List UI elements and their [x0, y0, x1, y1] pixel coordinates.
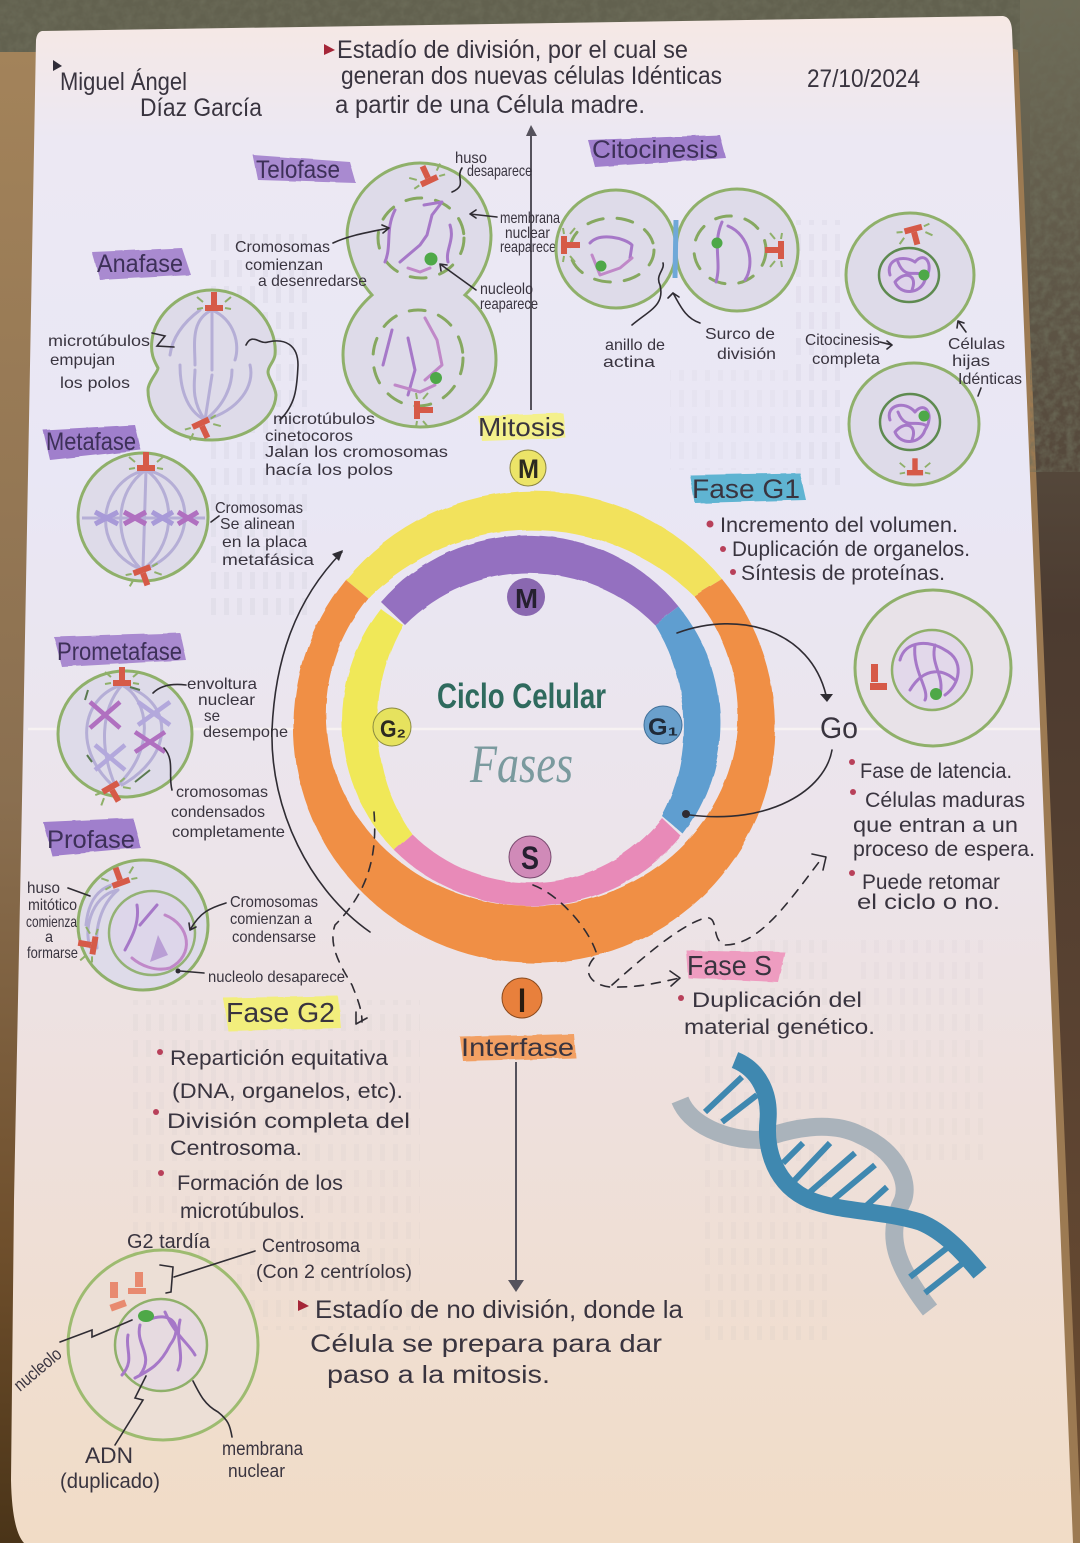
inner ring: G2 phase [342, 609, 412, 850]
cell: anafase [148, 290, 276, 445]
telofase labels: nucleolo [480, 281, 533, 298]
profase labels: mitótico [28, 897, 77, 914]
profase labels: comienzan a [230, 911, 312, 928]
G2 tardia labels [10, 1231, 412, 1493]
prometafase labels: nuclear [198, 692, 256, 709]
metafase labels: metafásica [222, 552, 314, 569]
anafase labels: los polos [60, 375, 130, 392]
cell: G2 tardia [68, 1250, 258, 1440]
G2 tardia labels: nucleolo [10, 1344, 65, 1395]
panel: Fase G1 [690, 473, 970, 585]
arrow: G1 to G0 [677, 624, 833, 702]
cell: metafase [78, 452, 208, 591]
profase labels: nucleolo desaparece [208, 969, 345, 986]
outer ring: interphase segment [293, 579, 775, 963]
author name: Díaz García [140, 94, 262, 122]
center title: Ciclo Celular [437, 677, 606, 716]
heading: Prometafase: Prometafase [57, 638, 182, 666]
heading: Profase [43, 818, 141, 856]
arrow: cycle progression left [272, 550, 370, 932]
arrow: G0 to G1 [682, 750, 832, 818]
daughter cell labels: completa [812, 351, 880, 368]
dashed arrow: G2 to Fase G2 [333, 812, 375, 1024]
cell: profase [75, 860, 208, 990]
profase labels: condensarse [232, 929, 316, 946]
phase badge: S: S [521, 840, 539, 876]
anafase labels [48, 333, 448, 479]
anafase labels: microtúbulos [273, 411, 375, 428]
metafase labels: en la placa [222, 534, 307, 551]
dashed arrow: S to Fase S and G0 [533, 854, 826, 987]
mitosis definition [324, 36, 722, 119]
cell: prometafase [58, 667, 192, 810]
telofase labels: a desenredarse [258, 273, 367, 290]
telofase labels: membrana [500, 210, 560, 227]
G2 tardia labels: Centrosoma [262, 1236, 360, 1257]
inner ring: G1 phase [655, 607, 720, 834]
heading: Citocinesis: Citocinesis [592, 136, 718, 164]
metafase labels [211, 500, 314, 569]
center title [437, 677, 606, 794]
arrow: interphase down [508, 1062, 524, 1292]
panel: Fase G2: microtúbulos. [180, 1200, 305, 1223]
phase badge: I: I [518, 982, 526, 1020]
panel: Fase S: Fase S [687, 950, 772, 981]
phase badge: G1 [644, 706, 682, 744]
panel: Fase G1: Incremento del volumen. [720, 514, 958, 537]
metafase labels: Se alinean [220, 516, 295, 533]
profase labels: comienza [26, 914, 77, 931]
heading: Telofase: Telofase [256, 156, 340, 184]
panel: Fase S: material genético. [684, 1016, 875, 1039]
phase badge: M purple: M [515, 583, 538, 614]
inner ring: M phase [381, 535, 679, 625]
cell: telofase [343, 159, 496, 427]
panel: Fase G1: Duplicación de organelos. [732, 538, 970, 561]
cell: G0 [855, 590, 1011, 746]
inner ring: S phase [394, 818, 681, 906]
panel: Fase G2: Centrosoma. [170, 1137, 302, 1160]
cell: citocinesis [556, 189, 798, 311]
mitosis definition: Estadío de división, por el cual se [337, 36, 688, 64]
metafase labels: Cromosomas [215, 500, 303, 517]
heading: Profase: Profase [47, 826, 135, 854]
telofase labels: nuclear [505, 225, 551, 242]
G2 tardia labels: (duplicado) [60, 1470, 160, 1493]
panel: Fase G2: División completa del [167, 1110, 410, 1133]
phase badge: G1: G₁ [648, 714, 678, 741]
telofase labels: reaparece [500, 239, 556, 256]
icon: DNA helix [680, 1060, 980, 1310]
prometafase labels: completamente [172, 824, 285, 841]
telofase labels: desaparece [467, 163, 532, 180]
daughter cell labels [805, 321, 1022, 396]
G2 tardia labels: ADN [85, 1443, 133, 1468]
panel: Fase G1: Síntesis de proteínas. [741, 562, 945, 585]
cell: daughter bottom [849, 363, 979, 485]
panel: Fase S [678, 950, 875, 1039]
prometafase labels: envoltura [187, 676, 257, 693]
citocinesis labels: actina [603, 354, 655, 371]
panel: G0 text: proceso de espera. [853, 838, 1035, 861]
daughter cell labels: hijas [952, 353, 990, 370]
phase badge: M yellow: M [518, 454, 539, 484]
interphase definition: Estadío de no división, donde la [315, 1296, 683, 1324]
citocinesis labels: Surco de [705, 326, 775, 343]
daughter cell labels: Citocinesis [805, 332, 880, 349]
G2 tardia labels: membrana [222, 1439, 303, 1460]
profase labels: formarse [27, 945, 78, 962]
phase badge: G2: G₂ [380, 716, 406, 743]
date: 27/10/2024 [807, 65, 920, 93]
author name: Miguel Ángel [60, 67, 187, 96]
anafase labels: hacía los polos [265, 462, 393, 479]
G2 tardia labels: G2 tardía [127, 1231, 211, 1253]
label: Mitosis: Mitosis [478, 412, 565, 442]
panel: G0 text: Fase de latencia. [860, 760, 1012, 783]
prometafase labels: desempone [203, 724, 288, 741]
interphase definition: Célula se prepara para dar [310, 1330, 662, 1358]
telofase labels: Cromosomas [235, 239, 330, 256]
profase labels: a [45, 929, 53, 946]
profase labels: huso [27, 880, 60, 897]
anafase labels: cinetocoros [265, 428, 353, 445]
G2 tardia labels: nuclear [228, 1461, 285, 1481]
telofase labels: reaparece [480, 296, 538, 313]
panel: Fase S: Duplicación del [692, 989, 862, 1012]
daughter cell labels: Células [948, 336, 1005, 353]
center title: Fases [469, 734, 573, 794]
profase labels [26, 880, 345, 986]
prometafase labels: se [204, 708, 220, 725]
panel: Fase G2: (DNA, organelos, etc). [172, 1080, 403, 1103]
panel: Fase G1: Fase G1 [692, 474, 800, 504]
interphase definition: paso a la mitosis. [327, 1361, 550, 1389]
panel: G0 text [849, 759, 1035, 914]
panel: G0 text: Puede retomar [862, 871, 1000, 894]
profase labels: Cromosomas [230, 894, 318, 911]
panel: Fase G2: Repartición equitativa [170, 1047, 388, 1070]
mitosis definition: a partir de una Célula madre. [335, 91, 645, 119]
phase badge: I [502, 978, 542, 1020]
citocinesis labels: división [717, 346, 776, 363]
cell: daughter top [846, 213, 974, 337]
label: G0: Go [820, 712, 858, 745]
interphase definition [298, 1296, 683, 1389]
heading: Metafase: Metafase [46, 428, 136, 456]
telofase labels: huso [455, 150, 487, 167]
phase badge: M purple [507, 578, 545, 616]
arrow: mitosis up [526, 125, 537, 410]
panel: G0 text: el ciclo o no. [857, 891, 1000, 914]
panel: Fase G2: Formación de los [177, 1172, 343, 1195]
phase badge: G2 [373, 708, 411, 746]
panel: G0 text: Células maduras [865, 789, 1025, 812]
anafase labels: Jalan los cromosomas [265, 444, 448, 461]
panel: Fase G2: Fase G2 [226, 997, 335, 1028]
prometafase labels [153, 676, 288, 841]
outer ring: mitosis segment [346, 491, 722, 598]
daughter cell labels: Idénticas [958, 371, 1022, 388]
prometafase labels: condensados [171, 804, 265, 821]
telofase labels: comienzan [245, 257, 323, 274]
anafase labels: microtúbulos [48, 333, 150, 350]
citocinesis labels: anillo de [605, 337, 665, 354]
G2 tardia labels: (Con 2 centríolos) [256, 1262, 412, 1283]
panel: G0 text: que entran a un [853, 814, 1018, 837]
prometafase labels: cromosomas [176, 784, 268, 801]
cell cycle ring [293, 491, 775, 963]
phase badge: S [509, 836, 551, 878]
mitosis definition: generan dos nuevas células Idénticas [341, 62, 722, 90]
phase badge: M yellow [510, 450, 546, 486]
heading: Anafase: Anafase [97, 250, 183, 278]
panel: Fase G2 [153, 996, 410, 1223]
author name [53, 60, 262, 122]
citocinesis labels [603, 263, 776, 371]
label: Interfase: Interfase [461, 1034, 574, 1062]
anafase labels: empujan [50, 352, 115, 369]
telofase labels [235, 150, 560, 313]
